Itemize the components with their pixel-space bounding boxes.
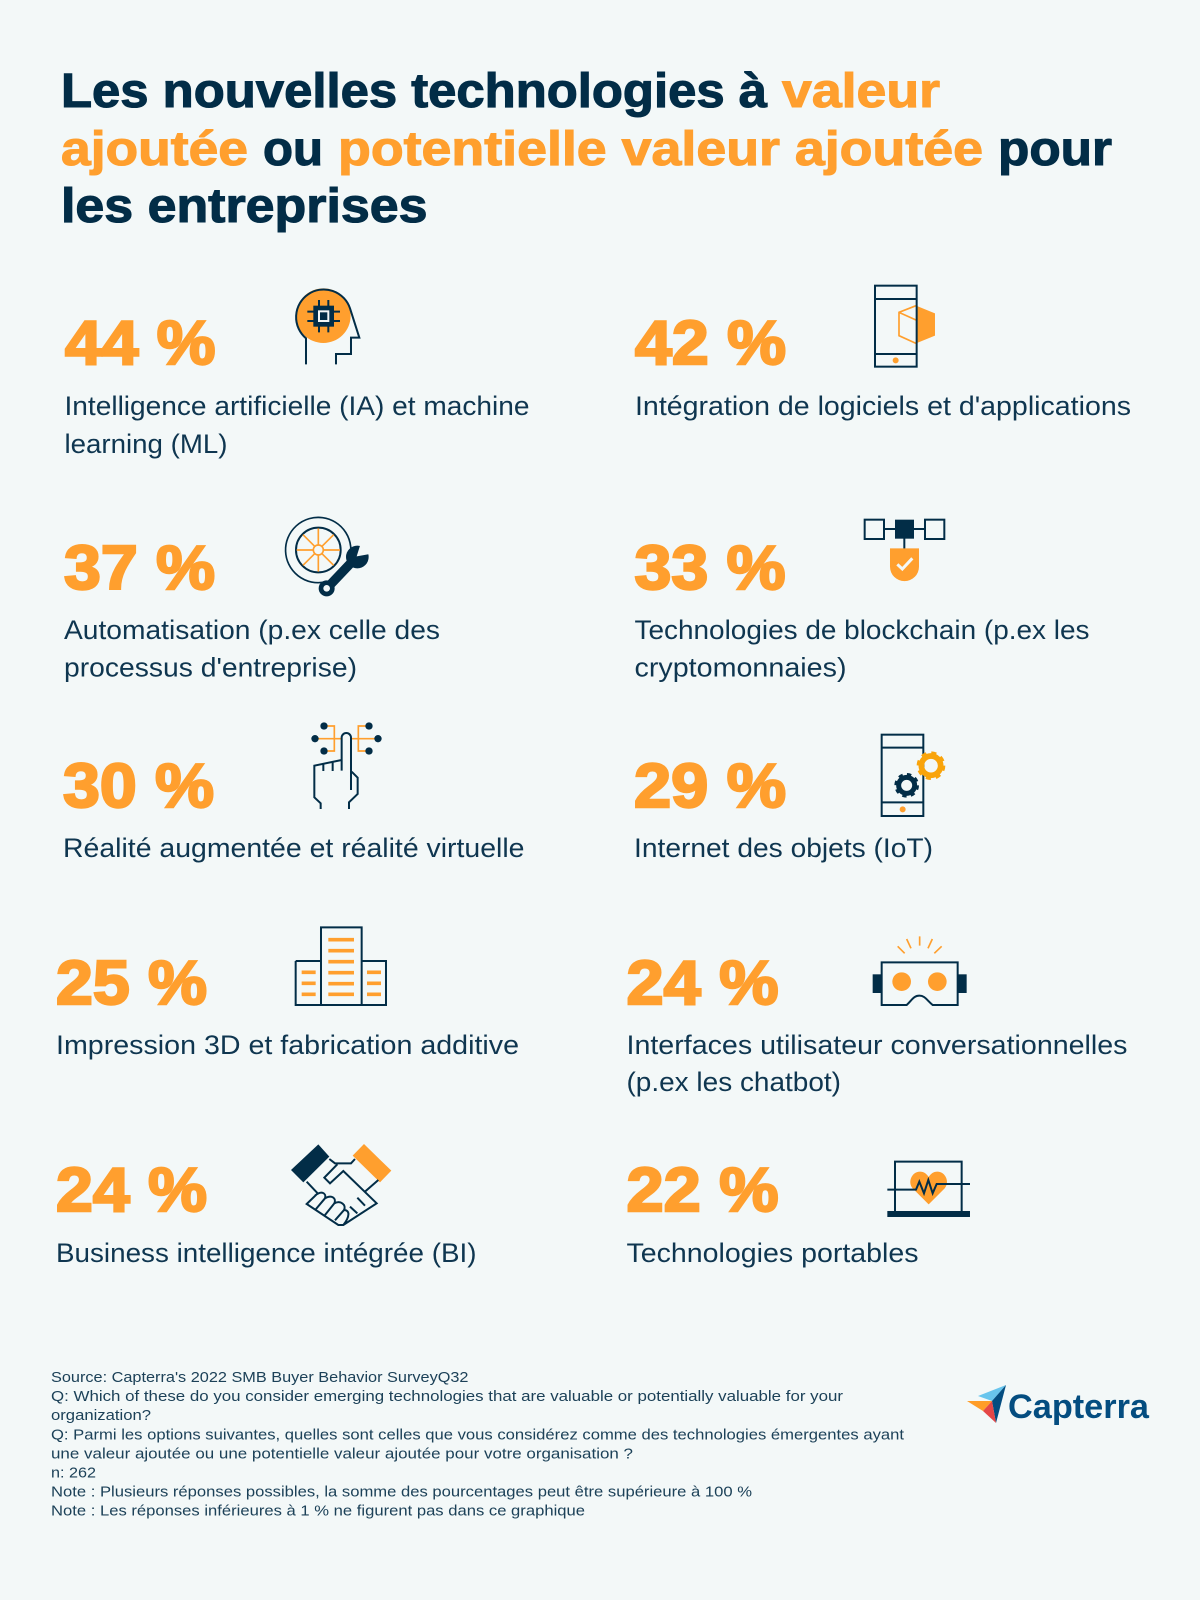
- stat: 22 %: 22 %: [626, 1156, 778, 1225]
- stat: 44 %: 44 %: [65, 309, 216, 378]
- icon: wheel and wrench: [286, 517, 372, 596]
- panel: internet des objets: [634, 735, 944, 863]
- icon: buildings: [296, 927, 386, 1005]
- icon: VR headset: [873, 936, 967, 1005]
- icon: phone with cube: [875, 286, 935, 367]
- title: [61, 65, 1112, 233]
- stat: 37 %: 37 %: [64, 534, 215, 603]
- label: impression 3D: Impression 3D et fabrication additive: [56, 1030, 519, 1060]
- title: valeur: [782, 65, 940, 118]
- label: interfaces conversationnelles: Interfaces utilisateur conversationnelles: [626, 1030, 1128, 1060]
- stat: 24 %: 24 %: [626, 949, 778, 1018]
- label: internet des objets: Internet des objets (IoT): [634, 833, 933, 863]
- stat: 29 %: 29 %: [634, 752, 786, 821]
- icon: heart monitor: [887, 1162, 970, 1217]
- icon: phone with gears: [882, 735, 944, 816]
- label: intelligence artificielle: learning (ML): [64, 429, 228, 459]
- icon: handshake: [291, 1144, 391, 1225]
- source notes: [51, 1369, 905, 1520]
- panel: blockchain: [634, 520, 1090, 682]
- title: Les nouvelles technologies à: [61, 65, 767, 118]
- panel: intelligence artificielle: [64, 288, 530, 459]
- label: blockchain: Technologies de blockchain (p.ex les: [634, 615, 1090, 645]
- icon: blockchain shield: [865, 520, 944, 581]
- label: business intelligence: Business intelligence intégrée (BI): [56, 1238, 476, 1268]
- panel: interfaces conversationnelles: [626, 936, 1128, 1097]
- source notes: n: 262: [51, 1464, 96, 1482]
- icon: hand touching nodes: [311, 722, 382, 809]
- label: automatisation: Automatisation (p.ex celle des: [64, 615, 440, 645]
- label: blockchain: cryptomonnaies): [634, 652, 846, 682]
- label: intelligence artificielle: Intelligence artificielle (IA) et machine: [64, 391, 530, 421]
- title: ajoutée: [61, 123, 248, 176]
- label: integration: Intégration de logiciels et d'applications: [635, 391, 1131, 421]
- source notes: organization?: [51, 1407, 151, 1424]
- label: automatisation: processus d'entreprise): [64, 652, 357, 682]
- logo: Capterra: Capterra: [1008, 1388, 1150, 1426]
- stat: 33 %: 33 %: [634, 534, 786, 603]
- source notes: Source: Capterra's 2022 SMB Buyer Behavior SurveyQ32: [51, 1369, 468, 1386]
- source notes: Q: Parmi les options suivantes, quelles sont celles que vous considérez comme des technologies émergentes ayant: [51, 1426, 905, 1444]
- title: potentielle valeur ajoutée: [338, 123, 983, 176]
- source notes: Note : Plusieurs réponses possibles, la somme des pourcentages peut être supérieure à 100 %: [51, 1484, 752, 1500]
- stat: 25 %: 25 %: [56, 949, 207, 1018]
- label: technologies portables: Technologies portables: [626, 1238, 918, 1268]
- title: ou: [263, 123, 323, 176]
- panel: realite augmentee: [63, 722, 524, 863]
- source notes: Q: Which of these do you consider emerging technologies that are valuable or potentially valuable for your: [51, 1388, 843, 1405]
- title: les entreprises: [61, 180, 427, 233]
- panel: integration: [635, 286, 1131, 421]
- panel: business intelligence: [56, 1144, 476, 1268]
- label: interfaces conversationnelles: (p.ex les chatbot): [626, 1067, 841, 1097]
- stat: 30 %: 30 %: [63, 752, 214, 821]
- panel: impression 3D: [56, 927, 519, 1060]
- title: pour: [998, 123, 1112, 176]
- panel: technologies portables: [626, 1156, 970, 1268]
- source notes: Note : Les réponses inférieures à 1 % ne figurent pas dans ce graphique: [51, 1502, 585, 1520]
- icon: head with chip: [296, 288, 359, 364]
- source notes: une valeur ajoutée ou une potentielle valeur ajoutée pour votre organisation ?: [51, 1446, 633, 1462]
- stat: 24 %: 24 %: [56, 1156, 207, 1225]
- panel: automatisation: [64, 517, 440, 682]
- label: realite augmentee: Réalité augmentée et réalité virtuelle: [63, 833, 524, 863]
- stat: 42 %: 42 %: [635, 309, 786, 378]
